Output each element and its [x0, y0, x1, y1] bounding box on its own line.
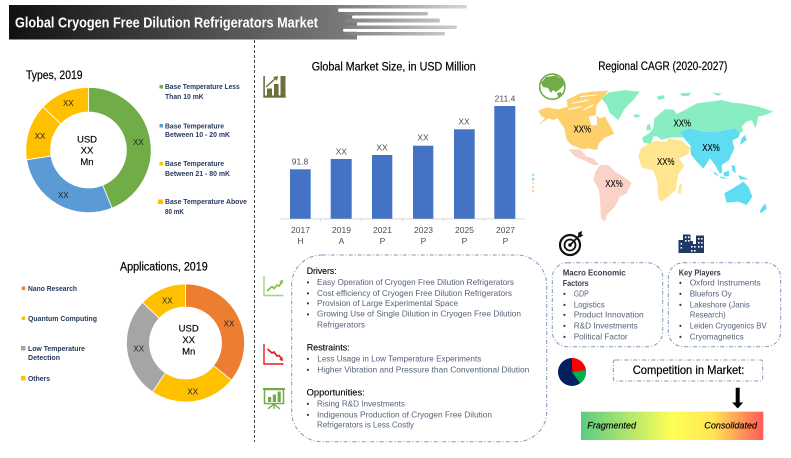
map labels: XX% — [702, 143, 720, 154]
axis labels: 2027 — [496, 225, 515, 235]
text block: drivers: • — [306, 299, 310, 308]
panel: key players: • — [679, 333, 682, 342]
title banner — [9, 5, 478, 40]
icon: buildings — [678, 234, 704, 253]
arrow: competition marker — [732, 388, 743, 408]
text block: restraints: • — [306, 366, 310, 375]
bar values: 211.4 — [495, 93, 516, 103]
panel: macro economic factors: Factors — [563, 278, 589, 288]
donut center: types: Mn — [80, 157, 94, 168]
text block: opportunities: • — [306, 400, 310, 409]
text block: opportunities: Rising R&D Investments — [317, 399, 405, 409]
donut values: applications: XX — [162, 296, 173, 305]
legend: applications: Quantum Computing — [28, 314, 97, 323]
text block: drivers — [306, 266, 521, 330]
axis labels: H — [297, 236, 304, 246]
icon: restraints trend down — [264, 344, 284, 364]
panel: key players: Oxford Instruments — [690, 278, 761, 288]
legend: types: 80 mK — [165, 207, 184, 216]
callout: competition in market — [613, 360, 763, 381]
donut values: types: XX — [133, 138, 144, 147]
panel: macro economic factors — [552, 263, 663, 347]
map labels: XX% — [605, 179, 623, 190]
title banner: Global Cryogen Free Dilution Refrigerators Market — [15, 14, 318, 32]
donut values: types: XX — [58, 191, 69, 200]
donut values: types — [35, 99, 144, 200]
donut center: types: USD — [77, 134, 97, 146]
text block: drivers: • — [306, 310, 310, 319]
map labels: XX% — [574, 124, 591, 136]
axis labels: 2023 — [414, 225, 433, 235]
text block: drivers: Refrigerators — [317, 320, 365, 330]
icon: opportunities presentation board — [263, 388, 285, 409]
map labels: XX% — [657, 157, 675, 168]
donut center: applications: Mn — [182, 346, 195, 358]
text block: restraints: Less Usage in Low Temperature Experiments — [317, 354, 481, 364]
legend: types: Base Temperature — [165, 121, 224, 130]
heading: applications: Applications, 2019 — [120, 262, 208, 274]
panel: macro economic factors: • — [563, 290, 566, 299]
callout: competition in market: Competition in Market: — [633, 363, 744, 377]
text block: opportunities: • — [306, 411, 310, 420]
text block: restraints — [306, 343, 530, 375]
text block: drivers: Provision of Large Experimental Space — [317, 298, 458, 308]
donut values: types: XX — [63, 99, 74, 108]
text block: drivers: Easy Operation of Cryogen Free Dilution Refrigerators — [317, 277, 514, 287]
panel: key players: • — [679, 322, 682, 331]
donut center: applications: USD — [179, 324, 199, 334]
text block: drivers: Growing Use of Single Dilution in Cryogen Free Dilution — [317, 309, 521, 319]
panel: key players: • — [679, 301, 682, 310]
panel: key players: Bluefors Oy — [690, 289, 732, 299]
donut chart: types — [26, 87, 151, 213]
panel: types donut — [26, 70, 247, 216]
vertical dashed divider — [254, 40, 256, 442]
text block: restraints: Higher Vibration and Pressure than Conventional Dilution — [317, 365, 530, 375]
donut center: types: XX — [81, 146, 94, 156]
panel: macro economic factors: Political Factor — [574, 332, 628, 342]
panel: key players: • — [679, 279, 682, 288]
icon: market share pie — [558, 358, 586, 386]
panel: macro economic factors: Logistics — [574, 300, 605, 310]
text block: drivers: Drivers: — [307, 266, 337, 276]
panel: key players: Leiden Cryogenics BV — [690, 321, 767, 331]
panel: key players: Research) — [690, 310, 726, 320]
text block: opportunities: Refrigerators is Less Costly — [317, 420, 415, 430]
panel: macro economic factors: • — [563, 311, 566, 320]
heading: types: Types, 2019 — [26, 70, 82, 82]
axis labels: 2017 — [291, 225, 310, 235]
competition gradient scale: Consolidated — [704, 420, 758, 430]
axis labels: P — [503, 236, 509, 246]
bar values: XX — [417, 132, 429, 142]
axis labels: 2025 — [455, 225, 474, 235]
legend: applications: Detection — [28, 353, 60, 362]
text block: restraints: Restraints: — [307, 343, 350, 353]
panel: key players: Key Players — [679, 268, 721, 278]
axis labels: 2019 — [332, 225, 351, 235]
icon: bar growth — [263, 76, 286, 98]
bar values: XX — [458, 116, 470, 126]
map labels: XX% — [674, 118, 691, 130]
donut center: types — [77, 134, 97, 168]
legend: types: Base Temperature — [165, 159, 224, 168]
panel: macro economic factors: Product Innovation — [574, 310, 644, 320]
legend: types: Between 10 - 20 mK — [165, 130, 231, 139]
donut values: applications: XX — [187, 387, 199, 396]
donut values: applications — [133, 296, 235, 396]
panel: key players: Lakeshore (Janis — [690, 300, 750, 310]
heading: regional CAGR: Regional CAGR (2020-2027) — [598, 61, 727, 73]
icon: target — [560, 231, 584, 255]
text block: opportunities: Opportunities: — [307, 388, 365, 398]
legend: types: Base Temperature Above — [165, 197, 247, 206]
axis labels: A — [339, 236, 345, 246]
map labels — [574, 118, 720, 190]
competition gradient scale — [581, 412, 763, 440]
axis labels — [291, 225, 515, 246]
axis labels: P — [421, 236, 427, 246]
panel: regional CAGR — [532, 61, 773, 222]
bar values: 91.8 — [292, 157, 309, 167]
text block: opportunities — [306, 388, 492, 430]
legend: types: Between 21 - 80 mK — [165, 169, 231, 178]
donut values: types: XX — [35, 132, 46, 141]
legend: types — [158, 82, 247, 216]
icon: globe — [540, 74, 565, 99]
legend: applications — [21, 284, 97, 383]
bar values — [292, 93, 516, 167]
icon: drivers trend up — [264, 276, 284, 296]
axis labels: 2021 — [373, 225, 392, 235]
axis labels: P — [462, 236, 468, 246]
panel: key players: Cryomagnetics — [690, 332, 744, 342]
legend: applications: Others — [28, 374, 50, 383]
text block: drivers: • — [306, 278, 310, 287]
donut chart: applications — [126, 284, 245, 402]
panel: macro economic factors: • — [563, 301, 566, 310]
panel: macro economic factors: • — [563, 333, 566, 342]
panel: drivers restraints opportunities — [292, 255, 547, 442]
bar values: XX — [376, 142, 388, 152]
text block: drivers: • — [306, 289, 310, 298]
panel: applications donut — [21, 262, 245, 402]
competition gradient scale: Fragmented — [587, 420, 637, 430]
panel: macro economic factors: Macro Economic — [563, 268, 626, 278]
bar values: XX — [336, 147, 347, 157]
legend: applications: Nano Research — [28, 284, 77, 293]
panel: macro economic factors: GDP — [574, 289, 589, 299]
text block: opportunities: Indigenous Production of Cryogen Free Dilution — [317, 410, 492, 420]
panel: key players: • — [679, 290, 682, 299]
legend: applications: Low Temperature — [28, 344, 85, 353]
donut center: applications: XX — [182, 335, 196, 346]
panel: macro economic factors: R&D Investments — [574, 321, 638, 331]
text block: drivers: Cost efficiency of Cryogen Free Dilution Refrigerators — [317, 288, 512, 298]
panel: macro economic factors: • — [563, 322, 566, 331]
axis labels: P — [380, 236, 386, 246]
text block: restraints: • — [306, 355, 310, 364]
donut values: applications: XX — [133, 344, 145, 353]
panel: key players — [668, 263, 781, 347]
world map — [532, 90, 773, 222]
legend: types: Base Temperature Less — [165, 82, 240, 91]
donut values: applications: XX — [224, 319, 235, 328]
panel: global market size — [263, 62, 525, 246]
heading: market size: Global Market Size, in USD Million — [312, 62, 476, 74]
donut center: applications — [179, 324, 199, 358]
legend: types: Than 10 mK — [165, 92, 204, 101]
bar chart — [280, 93, 525, 246]
